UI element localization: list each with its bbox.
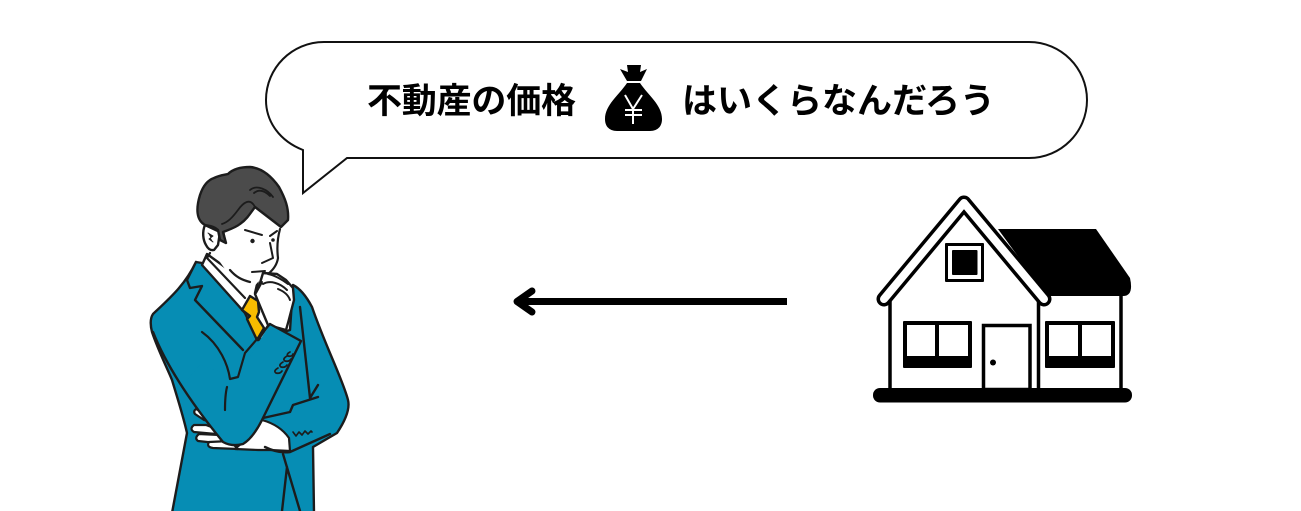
sleeve buttons <box>275 352 293 373</box>
door <box>984 326 1030 390</box>
face features <box>245 230 277 272</box>
right hand under arm <box>235 420 290 451</box>
left hand fingers <box>192 409 290 451</box>
speech text right: はいくらなんだろう <box>682 82 995 121</box>
shirt <box>202 254 270 340</box>
right sleeve cuff <box>265 434 330 452</box>
sleeve fold lines <box>202 324 270 410</box>
house walls <box>1119 294 1123 390</box>
raised hand <box>255 273 294 330</box>
man in blue suit thinking <box>151 167 349 511</box>
face fill <box>208 207 281 297</box>
house front gable fill <box>892 212 1037 387</box>
hair <box>197 167 288 243</box>
right sleeve lines <box>263 307 318 418</box>
house gable roof band <box>884 203 1044 299</box>
speech text left: 不動産の価格 <box>367 82 576 121</box>
right window <box>1045 321 1115 368</box>
hair strands <box>222 188 273 224</box>
ear <box>203 225 220 250</box>
icon: house <box>873 203 1132 402</box>
coat centre lines <box>282 454 300 511</box>
icon: yen money bag <box>605 65 662 131</box>
house dark roof <box>998 229 1131 296</box>
speech bubble <box>266 42 1087 193</box>
forearm outlines <box>153 324 301 445</box>
main forearm sleeve <box>180 324 301 445</box>
left window <box>903 321 972 368</box>
arrow pointing to man <box>517 291 787 312</box>
tie <box>242 296 264 340</box>
face contour and neck lines <box>207 229 280 298</box>
attic window <box>945 243 984 282</box>
lapel <box>187 262 243 350</box>
house base <box>873 388 1132 402</box>
lower sleeve buttons <box>293 431 312 436</box>
jacket body <box>151 262 349 511</box>
